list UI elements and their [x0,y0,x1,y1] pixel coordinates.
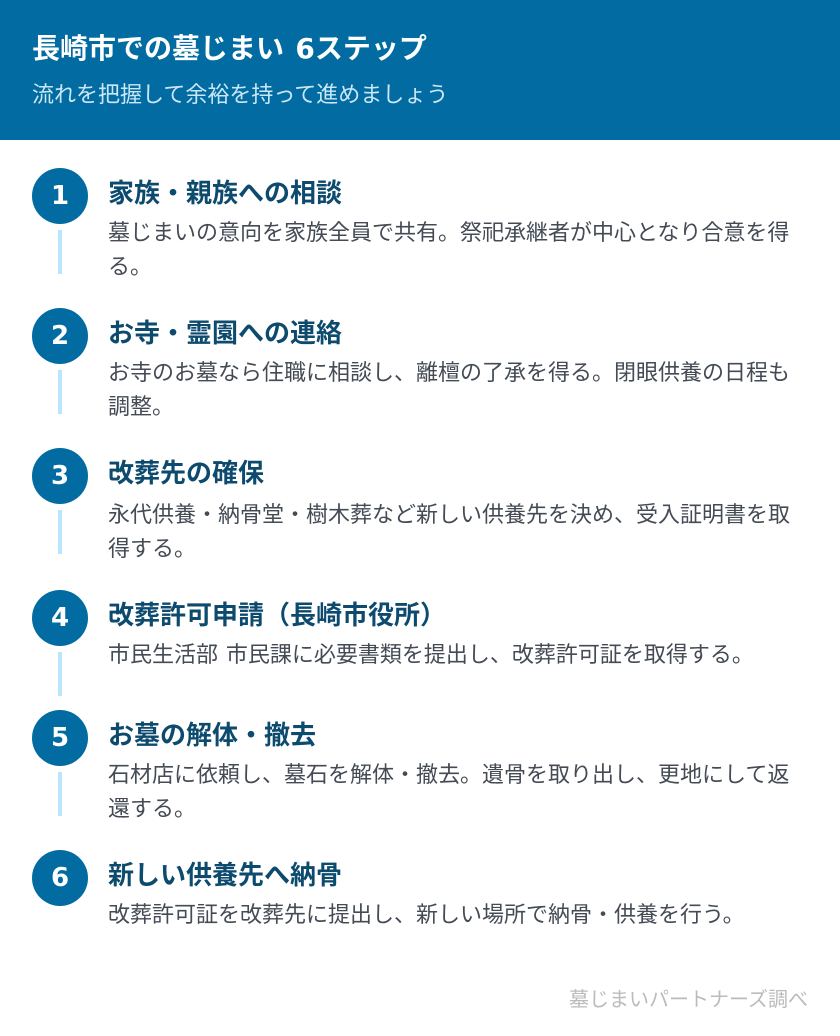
number badge 6: 6 [51,863,69,893]
step 6 [32,850,745,929]
step 2 description: お寺のお墓なら住職に相談し、離檀の了承を得る。閉眼供養の日程も [108,355,790,387]
title: 長崎市での墓じまい 6ステップ [32,27,427,67]
step 2 [32,308,790,421]
source credit: 墓じまいパートナーズ調べ [569,983,808,1012]
number badge 3: 3 [51,461,69,491]
step 3 heading: 改葬先の確保 [108,453,264,490]
header banner [0,0,840,140]
number badge 5: 5 [51,723,69,753]
step 6 heading: 新しい供養先へ納骨 [108,855,342,892]
step 1 heading: 家族・親族への相談 [108,173,342,210]
step 1 description: る。 [108,249,152,281]
step 2 description: 調整。 [108,389,174,421]
number badge 4: 4 [51,603,69,633]
number badge 5 [32,710,88,766]
number badge 1: 1 [51,181,69,211]
step 3 description [108,497,790,563]
step 2 heading: お寺・霊園への連絡 [108,313,342,350]
step 5 description: 還する。 [108,791,196,823]
step 3 [32,448,790,563]
connector line [58,652,62,696]
step 1 description: 墓じまいの意向を家族全員で共有。祭祀承継者が中心となり合意を得 [108,215,789,247]
number badge 4 [32,590,88,646]
number badge 2: 2 [51,321,69,351]
step 2 description [108,355,790,421]
number badge 3 [32,448,88,504]
step 5 [32,710,789,823]
step 6 description: 改葬許可証を改葬先に提出し、新しい場所で納骨・供養を行う。 [108,897,745,929]
step 3 description: 得する。 [108,531,196,563]
step 5 description: 石材店に依頼し、墓石を解体・撤去。遺骨を取り出し、更地にして返 [108,757,789,789]
step 1 [32,168,789,281]
step 4 heading: 改葬許可申請（長崎市役所） [108,595,446,632]
number badge 6 [32,850,88,906]
step 5 heading: お墓の解体・撤去 [108,715,316,752]
subtitle: 流れを把握して余裕を持って進めましょう [32,77,448,109]
connector line [58,772,62,816]
step 4 description: 市民生活部 市民課に必要書類を提出し、改葬許可証を取得する。 [108,637,754,669]
step 4 [32,590,754,696]
number badge 1 [32,168,88,224]
step 1 description [108,215,789,281]
step 5 description [108,757,789,823]
number badge 2 [32,308,88,364]
connector line [58,370,62,414]
connector line [58,230,62,274]
connector line [58,510,62,554]
step 3 description: 永代供養・納骨堂・樹木葬など新しい供養先を決め、受入証明書を取 [108,497,790,529]
